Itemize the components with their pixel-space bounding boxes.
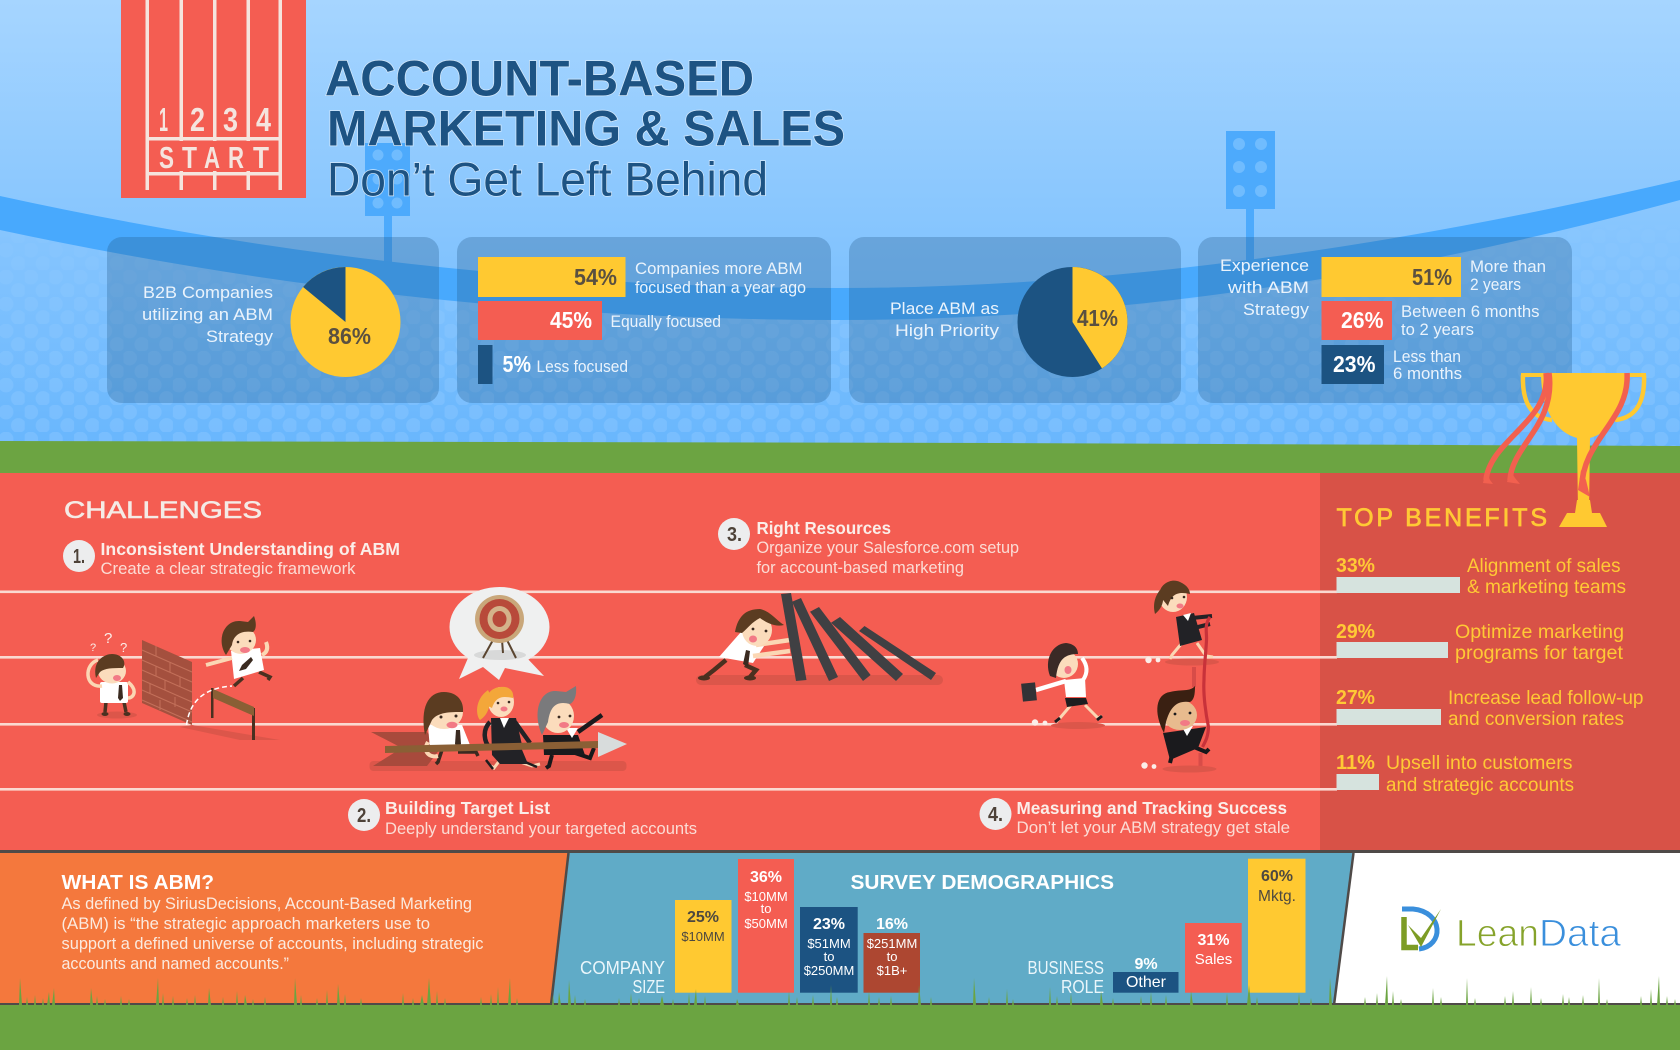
brick wall bbox=[142, 640, 280, 740]
bar: 36% $10MM to $50MM: to bbox=[761, 901, 771, 916]
bar: 60% marketing: Mktg. bbox=[1258, 888, 1296, 905]
confused man: ? bbox=[90, 642, 96, 654]
start label: R bbox=[228, 140, 244, 175]
bar: 16% $251MM to $1B+: to bbox=[887, 949, 897, 964]
illustration: man pushing dominoes bbox=[696, 593, 943, 685]
bar: 23%: 6 months bbox=[1393, 365, 1462, 383]
label: experience with ABM strategy bbox=[1220, 257, 1310, 319]
heading: what is ABM: WHAT IS ABM? bbox=[62, 872, 214, 894]
illustration: confused man at brick wall and hurdle bbox=[88, 616, 280, 740]
bar: 26%: to 2 years bbox=[1401, 321, 1474, 339]
bar: 5%: Less focused bbox=[536, 358, 628, 376]
bar: 23% $51MM to $250MM: $250MM bbox=[804, 963, 854, 978]
panel background: top benefits bbox=[1320, 473, 1680, 851]
bar: 26%: Between 6 months bbox=[1401, 303, 1540, 321]
label: B2B companies: B2B Companies bbox=[143, 284, 273, 302]
benefit: 33%: 33% bbox=[1336, 555, 1375, 577]
bar: 9% other: 9% bbox=[1134, 956, 1158, 973]
person: woman bbox=[477, 687, 540, 769]
bar: 36% $10MM to $50MM: $50MM bbox=[744, 916, 788, 931]
woman at ribbon bbox=[1145, 581, 1219, 666]
start label: A bbox=[204, 140, 220, 175]
benefit: 11%: and strategic accounts bbox=[1386, 775, 1574, 796]
challenge 3: 3. bbox=[727, 524, 742, 546]
challenge 3: Right Resources bbox=[756, 518, 891, 538]
icon: right stadium light bbox=[1226, 131, 1275, 269]
panel: ABM as high priority bbox=[849, 237, 1181, 403]
panel: experience with ABM strategy bbox=[1198, 237, 1572, 403]
bar: 5%: 5% bbox=[502, 351, 531, 377]
confused man: ? bbox=[104, 630, 112, 647]
panel: B2B companies utilizing ABM bbox=[107, 237, 439, 403]
definition text: accounts and named accounts.” bbox=[62, 954, 289, 973]
icon: start line block bbox=[121, 0, 306, 198]
bar: 9% other: Other bbox=[1126, 974, 1167, 991]
pie chart: 86% bbox=[290, 267, 400, 377]
bar: 45% bbox=[478, 301, 721, 340]
bar: 36% $10MM to $50MM: $10MM bbox=[744, 889, 788, 904]
start label bbox=[159, 140, 269, 175]
bar: 23%: 23% bbox=[1333, 351, 1376, 377]
benefit: 29%: programs for target bbox=[1455, 643, 1624, 664]
bar: 60% marketing: 60% bbox=[1261, 868, 1293, 885]
bar: 31% sales bbox=[1185, 923, 1242, 993]
benefit: 27%: 27% bbox=[1336, 687, 1375, 709]
benefit: 27%: Increase lead follow-up bbox=[1448, 688, 1644, 709]
label: place ABM as high priority bbox=[890, 300, 1000, 340]
bar: 23% bbox=[1322, 345, 1462, 384]
challenge 3: Organize your Salesforce.com setup bbox=[756, 538, 1019, 557]
bar: 51%: 2 years bbox=[1470, 276, 1521, 294]
benefit: 33%: & marketing teams bbox=[1467, 577, 1626, 598]
definition text bbox=[62, 894, 484, 973]
jumping man bbox=[206, 616, 270, 686]
challenge 2: Building Target List bbox=[385, 798, 550, 818]
illustration: speech bubble with target bbox=[450, 587, 550, 680]
label: B2B companies: Strategy bbox=[206, 328, 274, 346]
bar: 54%: focused than a year ago bbox=[635, 279, 806, 297]
title: ACCOUNT-BASED bbox=[325, 50, 754, 106]
icon: start line block: 3 bbox=[223, 101, 238, 138]
logo text: LeanData: Lean bbox=[1456, 913, 1539, 955]
icon: left stadium light bbox=[365, 143, 410, 276]
label: business role: ROLE bbox=[1061, 977, 1104, 997]
label: company size: SIZE bbox=[632, 977, 665, 997]
arrow shaft and head bbox=[385, 741, 598, 753]
benefit: 27% bbox=[1336, 687, 1644, 730]
challenge 1: Create a clear strategic framework bbox=[100, 559, 356, 578]
benefit: 29% bbox=[1336, 621, 1624, 664]
bar: 54%: Companies more ABM bbox=[635, 260, 802, 278]
dominoes bbox=[781, 593, 936, 681]
icon: LeanData mark bbox=[1402, 909, 1441, 949]
benefit: 33% bbox=[1336, 555, 1626, 598]
bar: 25% $10MM: $10MM bbox=[681, 929, 725, 944]
bar: 16% $251MM to $1B+: $251MM bbox=[867, 936, 917, 951]
challenge 3 bbox=[718, 518, 1019, 577]
pie chart: 41% bbox=[1018, 267, 1128, 377]
panel: LeanData logo bbox=[1334, 853, 1680, 1005]
benefit: 29%: 29% bbox=[1336, 621, 1375, 643]
panel: survey demographics bbox=[551, 853, 1353, 1005]
icon: trophy bbox=[1483, 373, 1646, 527]
challenge 4: Measuring and Tracking Success bbox=[1016, 798, 1287, 818]
label: B2B companies bbox=[142, 284, 274, 346]
bottom man bbox=[1141, 686, 1216, 772]
heading: challenges: CHALLENGES bbox=[64, 497, 262, 524]
bar: 16% $251MM to $1B+: $1B+ bbox=[877, 963, 907, 978]
challenge 2 bbox=[348, 798, 697, 838]
stadium arc band bbox=[0, 180, 1680, 320]
bar: 23%: Less than bbox=[1393, 348, 1461, 366]
grass ground bbox=[0, 976, 1680, 1050]
heading: top benefits: TOP BENEFITS bbox=[1336, 504, 1547, 532]
definition text: support a defined universe of accounts, including strategic bbox=[62, 934, 484, 953]
title bbox=[325, 50, 845, 206]
challenge 1: Inconsistent Understanding of ABM bbox=[100, 539, 400, 559]
benefit: 29%: Optimize marketing bbox=[1455, 622, 1624, 643]
bar: 23% $51MM to $250MM: 23% bbox=[813, 916, 845, 933]
benefit: 27%: and conversion rates bbox=[1448, 709, 1624, 730]
green infield band bbox=[0, 441, 1680, 474]
bar: 25% $10MM: 25% bbox=[687, 909, 719, 926]
finish ribbon bbox=[1194, 667, 1200, 767]
person: left man bbox=[424, 692, 478, 764]
bar: 5% bbox=[478, 345, 628, 384]
bar: 23% $51MM to $250MM: $51MM bbox=[807, 936, 851, 951]
logo text: LeanData: Data bbox=[1539, 913, 1622, 955]
bar: 23% $51MM to $250MM: to bbox=[824, 949, 834, 964]
benefit: 11%: 11% bbox=[1336, 752, 1375, 774]
challenge 4: 4. bbox=[988, 804, 1003, 826]
bar: 31% sales: Sales bbox=[1195, 951, 1232, 968]
icon: start line block: 2 bbox=[190, 101, 205, 138]
challenge 4 bbox=[980, 798, 1290, 837]
bar: 16% $251MM to $1B+ bbox=[864, 916, 920, 993]
bar: 23% $51MM to $250MM bbox=[800, 907, 858, 993]
track lanes bbox=[0, 590, 1337, 791]
pie chart: 86%: 86% bbox=[328, 323, 371, 349]
confused man: ? bbox=[120, 640, 127, 655]
bar: 54%: 54% bbox=[574, 264, 617, 290]
confused man bbox=[88, 630, 137, 718]
panel: ABM focus compared to a year ago bbox=[457, 237, 831, 403]
icon: start line block: 1 bbox=[159, 101, 168, 138]
bar: 60% marketing bbox=[1248, 859, 1306, 993]
label: experience with ABM strategy: with ABM bbox=[1227, 279, 1309, 297]
bar: 51%: More than bbox=[1470, 258, 1546, 276]
definition text: As defined by SiriusDecisions, Account-Based Marketing bbox=[62, 894, 472, 913]
label: company size bbox=[580, 958, 665, 997]
benefit: 11% bbox=[1336, 752, 1574, 796]
bar: 51% bbox=[1322, 257, 1546, 297]
benefit: 33%: Alignment of sales bbox=[1467, 556, 1620, 577]
benefit: 11%: Upsell into customers bbox=[1386, 753, 1572, 774]
challenge 1 bbox=[63, 539, 400, 578]
bar: 51%: 51% bbox=[1412, 264, 1452, 290]
label: B2B companies: utilizing an ABM bbox=[142, 306, 273, 324]
bar: 9% other bbox=[1113, 956, 1178, 993]
label: business role bbox=[1028, 958, 1104, 997]
label: place ABM as high priority: Place ABM as bbox=[890, 300, 999, 318]
illustration: team carrying arrow bbox=[370, 686, 627, 771]
hurdle bbox=[211, 688, 255, 740]
illustration: running woman with briefcase bbox=[1021, 643, 1105, 729]
challenge 1: 1. bbox=[73, 546, 85, 568]
dashed jump arc bbox=[186, 686, 232, 725]
start label: T bbox=[253, 140, 269, 175]
challenge 2: Deeply understand your targeted accounts bbox=[385, 819, 697, 838]
running track bbox=[0, 473, 1320, 851]
bar: 31% sales: 31% bbox=[1197, 932, 1230, 949]
bar: 45%: 45% bbox=[550, 307, 592, 333]
bar: 36% $10MM to $50MM bbox=[738, 859, 794, 993]
sky background bbox=[0, 0, 1680, 450]
title: MARKETING & SALES bbox=[327, 100, 845, 156]
fletching bbox=[371, 732, 440, 766]
start label: T bbox=[182, 140, 197, 175]
bar: 16% $251MM to $1B+: 16% bbox=[876, 916, 908, 933]
panel: what is ABM bbox=[0, 853, 568, 1005]
illustration: winners and finish ribbon bbox=[1141, 581, 1219, 772]
bar: 54% bbox=[478, 257, 806, 297]
bar: 25% $10MM bbox=[675, 900, 732, 993]
heading: survey demographics: SURVEY DEMOGRAPHICS bbox=[850, 872, 1114, 894]
label: place ABM as high priority: High Priority bbox=[895, 322, 1000, 340]
section divider lines bbox=[0, 852, 1680, 1005]
title: Don’t Get Left Behind bbox=[327, 152, 768, 206]
man bbox=[698, 609, 790, 680]
label: experience with ABM strategy: Strategy bbox=[1243, 301, 1310, 319]
label: company size: COMPANY bbox=[580, 958, 665, 978]
start label: S bbox=[159, 140, 174, 175]
bar: 26% bbox=[1322, 301, 1540, 340]
challenge 4: Don’t let your ABM strategy get stale bbox=[1016, 818, 1290, 837]
person: gray-haired man bbox=[538, 686, 602, 768]
label: experience with ABM strategy: Experience bbox=[1220, 257, 1309, 275]
bar: 36% $10MM to $50MM: 36% bbox=[750, 869, 782, 886]
definition text: (ABM) is “the strategic approach marketers use to bbox=[62, 914, 430, 933]
challenge 2: 2. bbox=[357, 805, 371, 827]
label: business role: BUSINESS bbox=[1028, 958, 1104, 978]
pie chart: 41%: 41% bbox=[1077, 305, 1118, 331]
icon: start line block: 4 bbox=[256, 101, 272, 138]
bar: 26%: 26% bbox=[1341, 307, 1384, 333]
challenge 3: for account-based marketing bbox=[756, 558, 964, 577]
bar: 45%: Equally focused bbox=[610, 313, 721, 331]
